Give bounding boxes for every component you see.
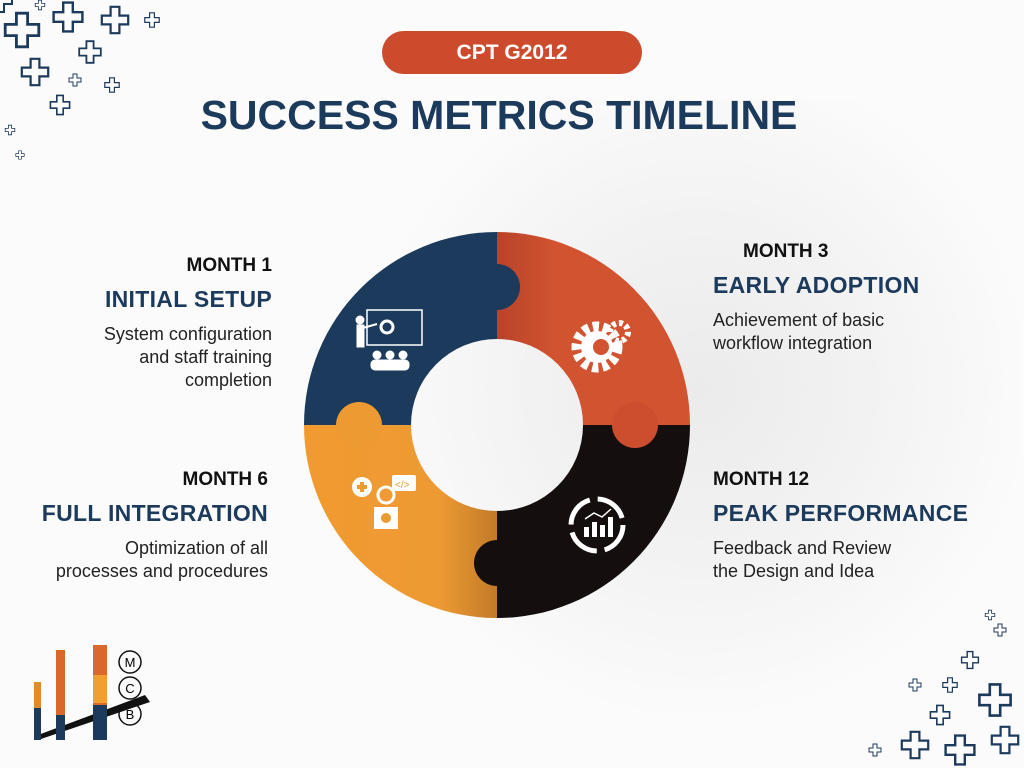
text block: Month 12: MONTH 12	[713, 469, 809, 490]
text block: Month 1	[104, 255, 272, 390]
badge: CPT G2012	[382, 31, 642, 74]
text block: Month 12: the Design and Idea	[713, 561, 874, 581]
text block: Month 6: Optimization of all	[125, 538, 268, 558]
logo: MCB bridge: M	[125, 655, 135, 670]
text block: Month 6	[42, 469, 268, 581]
text block: Month 1: completion	[185, 370, 272, 390]
text block: Month 1: MONTH 1	[186, 255, 272, 276]
text block: Month 6: MONTH 6	[182, 469, 268, 490]
icon: developer: </>	[395, 480, 410, 491]
text block: Month 12: Feedback and Review	[713, 538, 891, 558]
text block: Month 1: and staff training	[139, 347, 272, 367]
badge: CPT G2012: CPT G2012	[457, 41, 567, 64]
text block: Month 3	[713, 241, 920, 353]
text block: Month 1: INITIAL SETUP	[105, 286, 272, 312]
icon: gears	[577, 323, 628, 367]
text block: Month 3: Achievement of basic	[713, 310, 884, 330]
text block: Month 6: processes and procedures	[56, 561, 268, 581]
icon: chart in circle	[571, 499, 623, 551]
puzzle donut chart	[304, 232, 690, 618]
text block: Month 6: FULL INTEGRATION	[42, 500, 268, 526]
text block: Month 12	[713, 469, 968, 581]
text block: Month 3: workflow integration	[713, 333, 872, 353]
logo: MCB bridge	[34, 645, 150, 740]
decorative crosses bottom-right	[868, 610, 1020, 766]
segment: red	[497, 232, 690, 425]
logo: MCB bridge: B	[126, 707, 134, 722]
segment: orange	[304, 425, 497, 618]
title: SUCCESS METRICS TIMELINE	[201, 92, 797, 138]
text block: Month 3: EARLY ADOPTION	[713, 272, 920, 298]
segment: navy	[304, 232, 497, 425]
text block: Month 1: System configuration	[104, 324, 272, 344]
text block: Month 3: MONTH 3	[743, 241, 828, 262]
segment: black	[497, 425, 690, 618]
icon: developer	[352, 475, 416, 529]
background shading	[380, 100, 1020, 740]
text block: Month 12: PEAK PERFORMANCE	[713, 500, 968, 526]
decorative crosses top-left	[0, 0, 160, 160]
logo: MCB bridge: C	[125, 681, 135, 696]
icon: presentation	[356, 310, 422, 370]
